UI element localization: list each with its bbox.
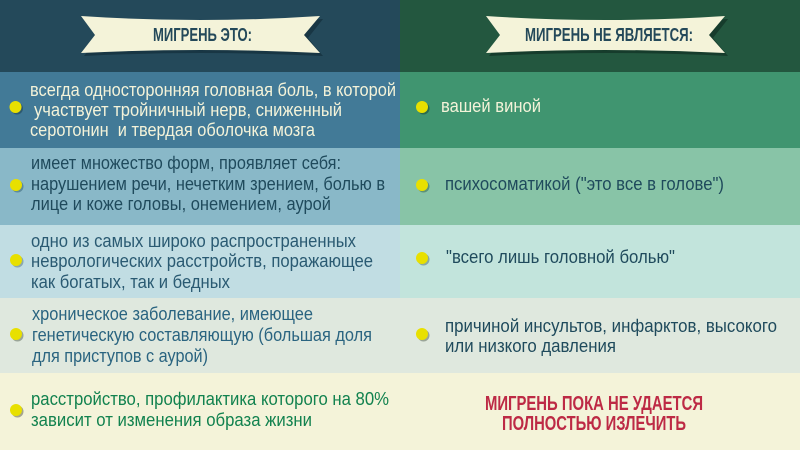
left item 5: зависит от изменения образа жизни — [31, 410, 312, 430]
left item 2: имеет множество форм, проявляет себя: — [31, 153, 341, 173]
left item 3: как богатых, так и бедных — [31, 272, 230, 292]
right callout: cannot be fully cured — [485, 393, 703, 435]
right header band — [400, 0, 800, 72]
left item 4: для приступов с аурой) — [32, 346, 208, 366]
left header band — [0, 0, 400, 72]
left row 3 background — [0, 225, 400, 298]
left item 3 — [10, 231, 373, 292]
right item 4: или низкого давления — [445, 336, 616, 356]
panel: migraine is (left column) — [0, 0, 400, 450]
left row 4 background — [0, 298, 400, 373]
heading text: МИГРЕНЬ ЭТО: — [153, 24, 252, 45]
right ribbon heading — [486, 16, 728, 56]
right row 3 background — [400, 225, 800, 298]
right item 3: "всего лишь головной болью" — [446, 247, 675, 267]
right item 4 — [416, 316, 777, 356]
panel: migraine is not (right column) — [400, 0, 800, 450]
left item 1 — [10, 80, 396, 140]
right item 2: психосоматикой ("это все в голове") — [445, 174, 724, 194]
left item 4 — [10, 304, 372, 366]
left item 2 — [10, 153, 385, 214]
left row 5 background — [0, 373, 400, 450]
right row 2 background — [400, 148, 800, 225]
left item 1: всегда односторонняя головная боль, в которой — [30, 80, 396, 100]
right item 4: причиной инсультов, инфарктов, высокого — [445, 316, 777, 336]
left item 4: генетическую составляющую (большая доля — [32, 325, 372, 345]
left item 2: нарушением речи, нечетким зрением, болью в — [31, 174, 385, 194]
left item 3: одно из самых широко распространенных — [31, 231, 356, 251]
left item 3: неврологических расстройств, поражающее — [31, 251, 373, 271]
right item 1: вашей виной — [441, 96, 541, 116]
right row 5 background — [400, 373, 800, 450]
left row 2 background — [0, 148, 400, 225]
left item 5 — [10, 389, 389, 430]
right row 4 background — [400, 298, 800, 373]
heading text: МИГРЕНЬ НЕ ЯВЛЯЕТСЯ: — [525, 24, 693, 45]
right callout: cannot be fully cured: ПОЛНОСТЬЮ ИЗЛЕЧИТЬ — [502, 413, 686, 435]
right callout: cannot be fully cured: МИГРЕНЬ ПОКА НЕ УДАЕТСЯ — [485, 393, 703, 415]
left item 1: серотонин и твердая оболочка мозга — [30, 120, 316, 140]
right row 1 background — [400, 72, 800, 148]
left ribbon heading — [81, 16, 323, 56]
left item 2: лице и коже головы, онемением, аурой — [31, 194, 331, 214]
left item 1: участвует тройничный нерв, сниженный — [34, 100, 342, 120]
left row 1 background — [0, 72, 400, 148]
left item 5: расстройство, профилактика которого на 80% — [31, 389, 389, 409]
left item 4: хроническое заболевание, имеющее — [32, 304, 313, 324]
